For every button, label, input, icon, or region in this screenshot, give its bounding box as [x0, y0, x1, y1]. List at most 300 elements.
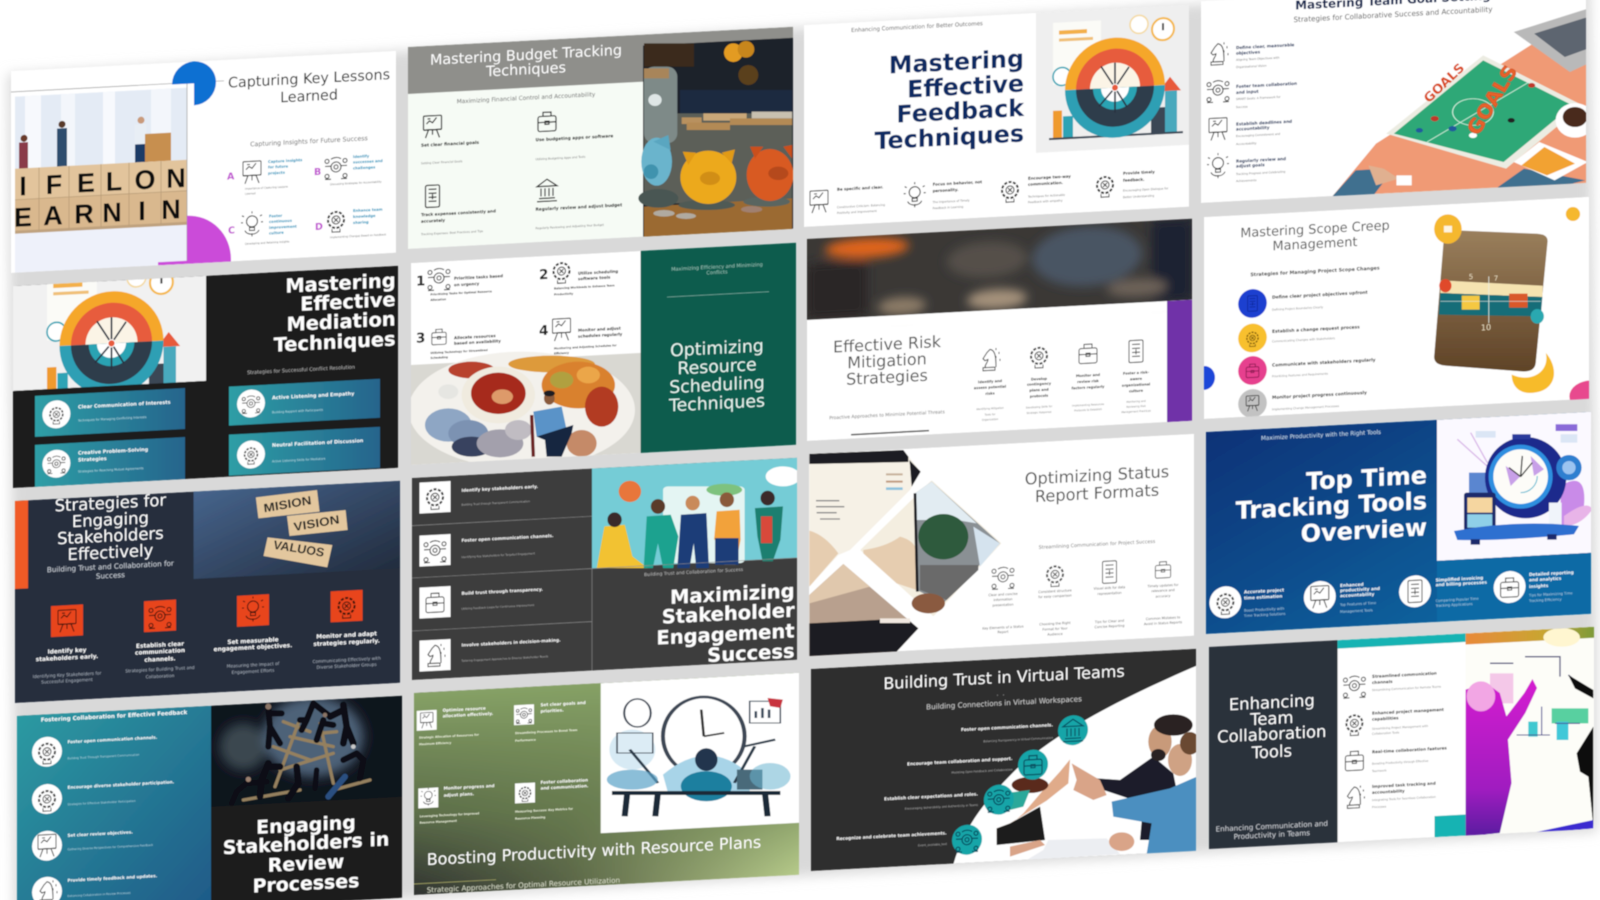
photo: lifelong learning blocks: I: [19, 171, 27, 202]
item: review objectives: Gathering Diverse Perspectives for Comprehensive Feedback: [68, 843, 154, 851]
item: review risk: Protocols to Establish: [1074, 407, 1102, 412]
item C: culture: [269, 231, 284, 235]
item: diverse participation: Encourage diverse stakeholder participation.: [68, 779, 174, 790]
item: deadlines: Accountability: [1236, 141, 1257, 146]
item: decision making: [420, 633, 561, 672]
graphic: speedometer dial: [13, 265, 206, 401]
item D: [315, 207, 387, 240]
illustration: team collaboration: [592, 456, 800, 579]
item: open communication: Balancing Transparency in Virtual Communication: [983, 736, 1053, 743]
item: measurable objectives: engagement objectives.: [214, 643, 292, 653]
item: consistent structure: Audience: [1047, 632, 1063, 637]
subtitle: [47, 559, 174, 583]
photo: person at whiteboard: [1466, 623, 1594, 840]
item: identify stakeholders: Building Trust through Transparent Communication: [462, 499, 530, 507]
item: goals priorities: [514, 700, 586, 743]
title: Top Time: [1306, 461, 1427, 496]
item: timely updates: relevance and: [1151, 588, 1175, 593]
item D: Implementing Changes Based on Feedback: [330, 232, 387, 239]
item: identify stakeholders: Identifying Key Stakeholders for: [33, 670, 102, 680]
item: track expenses: [420, 182, 496, 236]
item C: Foster: [269, 214, 282, 218]
title: Effectively: [67, 541, 154, 564]
photo: soccer board on desk: GOALS: [1421, 61, 1468, 106]
shape: magenta quarter circle: [158, 213, 231, 265]
item: risk aware culture: aware: [1130, 377, 1143, 381]
title: Effective: [907, 69, 1024, 104]
subtitle: Capturing Insights for Future Success: [250, 135, 368, 148]
item B: challenges: [353, 165, 376, 171]
item: achievements: [836, 824, 982, 862]
photo: lifelong learning blocks: F: [46, 169, 62, 200]
item: timely updates: Avoid in Status Reports: [1144, 620, 1182, 626]
item: team collaboration: Modeling Open Feedback and Collaboration: [952, 767, 1013, 775]
item D: knowledge: [353, 214, 376, 219]
item 4: [539, 315, 623, 356]
item: transparency: Build trust through transparency.: [462, 587, 543, 597]
panel: Optimizing Resource Scheduling Techniques: [408, 238, 797, 480]
item: clear concise: [982, 566, 1024, 635]
panel: Strategies for Engaging Stakeholders Effectively: [15, 478, 400, 703]
item: consistent structure: Choosing the Right: [1039, 621, 1071, 627]
item: monitor strategies: [312, 589, 381, 671]
item: clear concise: Key Elements of a Status: [982, 624, 1024, 631]
item: review goals: adjust goals: [1236, 162, 1265, 169]
title: Tracking Tools: [1236, 487, 1427, 525]
item: budgeting apps: [536, 109, 613, 161]
item: optimize allocation: allocation effectively.: [443, 711, 494, 718]
panel: Capturing Key Lessons Learned: [11, 51, 396, 273]
item: deadlines: Establish deadlines and: [1236, 119, 1292, 127]
item B: B: [314, 167, 321, 178]
title: Overview: [1301, 513, 1427, 548]
item 4: 4: [539, 323, 548, 339]
title: Engaging: [256, 812, 356, 839]
item: timely feedback: feedback.: [1123, 177, 1145, 183]
item: expectations: Encouraging Vulnerability and Authenticity in Teams: [905, 803, 979, 811]
item: accountability: productivity and: [1340, 586, 1380, 594]
item: identify risks: Identify and: [978, 379, 1002, 384]
title: Techniques: [874, 119, 1024, 155]
item: communication channels: Establish clear: [136, 642, 184, 650]
item: visual aids: [1094, 560, 1125, 629]
title: [1217, 690, 1326, 764]
item: goals priorities: Streamlining Processes to Boost Team: [515, 728, 577, 735]
item: collaboration: [1207, 76, 1297, 111]
panel: Maximizing Stakeholder Engagement Success: [412, 456, 800, 683]
item: project management: capabilities: [1372, 715, 1399, 722]
header band: [408, 27, 793, 94]
card: creative problem solving: Strategies: [78, 456, 107, 464]
item 4: Efficiency: [554, 351, 569, 355]
panel: Building Trust in Virtual Teams: [811, 649, 1200, 887]
item: monitor strategies: Diverse Stakeholder Groups: [317, 662, 377, 671]
item: change request: Communicating Changes with Stakeholders: [1272, 336, 1336, 343]
item 3: [416, 326, 501, 361]
item: open communication: Building Trust Through Transparent Communication: [68, 753, 140, 760]
photo: mission vision values blocks: MISION: [263, 493, 312, 515]
title: Tools: [1251, 741, 1292, 763]
photo: lifelong learning blocks: L: [106, 166, 122, 197]
panel: Effective Risk Mitigation Strategies: [807, 214, 1192, 441]
item: objectives: Defining Project Boundaries Clearly: [1272, 305, 1323, 312]
item: streamlined communication: Streamlining Communication for Remote Teams: [1372, 684, 1442, 692]
photo: lifelong learning blocks: E: [77, 168, 95, 199]
item: collaboration: Success: [1236, 105, 1248, 109]
card: active listening: [229, 379, 380, 426]
item: review objectives: Set clear review objectives.: [68, 829, 133, 838]
title: Engaging: [72, 508, 149, 531]
title: Strategies for: [55, 491, 166, 515]
item: collaboration: Foster team collaboration: [1236, 81, 1297, 89]
item: consistent structure: Format for Your: [1042, 626, 1068, 632]
item: reporting: Tracking Efficiency: [1528, 597, 1562, 603]
item 3: Allocate resources: [454, 333, 496, 340]
item: consistent structure: for easy comparison: [1038, 593, 1072, 599]
item: monitor strategies: Communicating Effectively with: [312, 655, 381, 665]
photo: mission vision values blocks: VISION: [293, 512, 340, 534]
title: Report Formats: [1035, 481, 1159, 506]
item: monitor: [1238, 383, 1367, 419]
title: Strategies: [846, 366, 928, 389]
item: identify stakeholders: Successful Engagement: [41, 677, 93, 686]
photo: plate with people: [408, 339, 641, 480]
item: accountability: Management Tools: [1340, 608, 1373, 614]
item: collaboration: [515, 777, 589, 821]
item: monitor: Monitor project progress continuously: [1272, 390, 1367, 401]
divider line: [667, 292, 769, 297]
subtitle: Enhancing Communication and: [1216, 819, 1328, 834]
title: Scheduling: [669, 373, 765, 398]
item: track expenses: Tracking Expenses: Best Practices and Tips: [420, 229, 484, 236]
item: monitor strategies: strategies regularly.: [313, 639, 380, 648]
item: reporting: Detailed reporting: [1529, 570, 1574, 578]
item C: improvement: [269, 224, 297, 230]
item 4: schedules regularly: [578, 331, 623, 339]
title: [55, 491, 166, 565]
subtitle: Strategies for Collaborative Success and Accountability: [1293, 5, 1493, 24]
photo: blurred meeting: [807, 214, 1192, 330]
photo: team high five: [997, 714, 1200, 860]
item: expectations: Establish clear expectations and roles.: [884, 791, 978, 802]
title: [1236, 461, 1427, 551]
title: Learned: [280, 87, 338, 106]
item 2: [539, 260, 618, 297]
subtitle: Enhancing Communication for Better Outcomes: [851, 21, 983, 34]
item: collaboration: Measuring Success: Key Metrics for: [515, 807, 574, 814]
item: optimize allocation: Optimize resource: [443, 706, 486, 713]
item: financial goals: Setting Clear Financial Goals: [421, 159, 463, 165]
title: Building Trust in Virtual Teams: [883, 662, 1125, 693]
item: measurable objectives: Measuring the Impact of: [227, 661, 280, 670]
item: streamlined communication: [1343, 670, 1442, 698]
item: focus on behavior: The Importance of Timely: [932, 198, 970, 204]
item A: A: [227, 171, 235, 183]
item: focus on behavior: Focus on behavior, not: [933, 179, 982, 187]
item 3: Utilizing Technology for Streamlined: [430, 348, 488, 355]
item: project management: Enhanced project management: [1372, 707, 1444, 716]
item: review goals: [1207, 150, 1286, 185]
photo: lifelong learning blocks: N: [102, 197, 122, 228]
item 2: Balancing Workloads to Enhance Team: [554, 283, 615, 290]
item: goals priorities: Performance: [515, 738, 536, 743]
lower band: [1437, 553, 1591, 622]
item: team collaboration: Encourage team collaboration and support.: [907, 756, 1013, 767]
shape: left blue half circle: [1193, 365, 1215, 391]
item D: Enhance team: [353, 207, 383, 213]
item: objectives: [1238, 283, 1368, 319]
item: goals priorities: priorities.: [540, 707, 564, 714]
subtitle: Success: [96, 570, 125, 581]
title: [1025, 462, 1169, 507]
item: budgeting apps: Use budgeting apps or software: [536, 133, 613, 143]
panel: Mastering Effective Mediation Techniques: [13, 254, 398, 488]
item: invoicing: [1399, 572, 1487, 610]
subtitle: [671, 262, 763, 278]
item: achievements: Recognize and celebrate team achievements.: [836, 830, 947, 842]
item: measurable objectives: Set measurable: [227, 637, 279, 646]
item: objectives: [1211, 39, 1295, 70]
item: decision making: Involve stakeholders in decision-making.: [462, 637, 561, 649]
photo: soccer board on desk: GOALS: [1462, 61, 1522, 139]
item: identify stakeholders: [420, 476, 538, 514]
decorative line and vertical rule: [11, 81, 224, 273]
item: monitor progress: adjust plans.: [444, 791, 475, 798]
title: Optimizing: [670, 336, 764, 361]
item: identify risks: Identifying Mitigation: [976, 406, 1004, 411]
item: real-time features: Teamwork: [1371, 768, 1387, 773]
item: estimation: Boost Productivity with: [1244, 607, 1284, 613]
item: be specific: Be specific and clear.: [837, 184, 884, 192]
title: Techniques: [485, 60, 566, 80]
item: optimize allocation: Strategic Allocation of Resources for: [419, 733, 479, 740]
item C: continuous: [269, 219, 293, 224]
item 1: 1: [416, 273, 425, 290]
card: creative problem solving: Creative Problem-Solving: [78, 447, 149, 457]
item: risk aware culture: culture: [1129, 389, 1144, 393]
item: task tracking: Processes: [1372, 804, 1387, 809]
item: clear concise: Clear and concise: [988, 592, 1018, 597]
photo: climbers on ladder: [211, 687, 402, 812]
white curved region: [953, 666, 1197, 866]
item: communicate: Communicate with stakeholders regularly: [1272, 357, 1376, 369]
item: invoicing: Comparing Popular Time: [1436, 597, 1479, 603]
item: communication channels: Strategies for Building Trust and: [125, 665, 195, 675]
item: monitor progress: Monitor progress and: [444, 783, 495, 791]
item D: D: [315, 222, 323, 233]
item: objectives: Aligning Team Objectives with: [1236, 56, 1280, 62]
teal top bar: [1338, 634, 1466, 649]
item: invoicing: and billing processes: [1436, 580, 1487, 588]
item 4: Monitoring and Adjusting Schedules for: [554, 343, 617, 350]
item: two-way communication: communication.: [1028, 180, 1064, 187]
item: be specific: [810, 184, 885, 216]
title: Collaboration: [1217, 722, 1326, 747]
item: contingency plans: plans and: [1029, 388, 1049, 393]
item: contingency plans: contingency: [1027, 381, 1052, 387]
item: accountability: Enhanced: [1340, 582, 1364, 589]
item: timely feedback: Better Understanding: [1123, 194, 1154, 199]
item A: [227, 158, 303, 197]
item: two-way communication: Techniques for Actionable: [1027, 193, 1065, 199]
item 3: based on availability: [454, 338, 501, 346]
title: Mastering Budget Tracking: [430, 43, 622, 69]
item: reporting: and analytics: [1529, 576, 1562, 583]
panel: Boosting Productivity with Resource Plans: [414, 673, 799, 895]
title: Mastering Scope Creep: [1240, 219, 1390, 241]
item: review risk: [1072, 343, 1105, 413]
item 4: Monitor and adjust: [578, 325, 621, 333]
title: Team: [1249, 708, 1293, 729]
subtitle: Building Trust and Collaboration for Success: [644, 567, 744, 578]
panel: Mastering Team Goal Setting: [1201, 0, 1594, 217]
item: review objectives: [32, 825, 154, 862]
subtitle: Productivity in Teams: [1234, 828, 1310, 841]
photo: mission vision values blocks: VALUOS: [272, 538, 326, 560]
photo: lifelong learning blocks: A: [43, 200, 63, 231]
item: open communication: [420, 529, 554, 567]
item: review risk: review risk: [1077, 379, 1100, 384]
item: two-way communication: Feedback with empathy: [1028, 198, 1063, 204]
item: track expenses: Track expenses consistently and: [421, 208, 496, 217]
item: streamlined communication: Streamlined communication: [1372, 671, 1437, 679]
item: collaboration: and communication.: [540, 783, 589, 791]
item: objectives: Define clear project objectives upfront: [1272, 290, 1368, 301]
panel: Mastering Effective Feedback Techniques: [804, 5, 1189, 227]
item: open communication: [961, 714, 1088, 751]
item: project management: [1346, 707, 1444, 737]
title: Feedback: [896, 94, 1025, 129]
photo: lifelong learning blocks: O: [134, 164, 156, 196]
title: Enhancing: [1229, 691, 1315, 714]
subtitle: Fostering Collaboration for Effective Feedback: [41, 710, 188, 724]
title: Capturing Key Lessons: [228, 67, 390, 92]
panel: Optimizing Status Report Formats: [809, 430, 1194, 667]
item: financial goals: [421, 113, 479, 165]
title: Mastering: [889, 44, 1024, 80]
item: invoicing: Simplified invoicing: [1436, 575, 1483, 584]
card: clear communication: [35, 388, 185, 437]
item: reporting: [1494, 568, 1574, 605]
item: risk aware culture: Foster a risk-: [1123, 370, 1150, 376]
card: active listening: Building Rapport with Participants: [272, 408, 323, 414]
item: transparency: Utilizing Feedback Loops for Continuous Improvement: [462, 603, 534, 611]
item: project management: Streamlining Project Management with: [1372, 724, 1428, 731]
item: review goals: Achievements: [1236, 178, 1257, 183]
item 1: Prioritize tasks based: [454, 273, 503, 281]
item: project management: Collaboration Tools: [1372, 730, 1400, 736]
title: Mitigation: [847, 349, 927, 372]
item: real-time features: Real-time collaboration features: [1372, 745, 1447, 754]
item: review goals: Regularly review and: [1236, 156, 1286, 164]
item: timely updates: Common Mistakes to: [1146, 615, 1180, 621]
item: budgeting apps: Utilizing Budgeting Apps and Tools: [536, 155, 586, 161]
item: communicate: [1238, 350, 1376, 386]
item: clear concise: Report: [998, 630, 1009, 634]
item: focus on behavior: Feedback in Learning: [933, 205, 964, 210]
item B: [314, 153, 383, 187]
item: risk aware culture: organizational: [1122, 382, 1150, 388]
item: review risk: Implementing Resources: [1072, 402, 1105, 408]
card: creative problem solving: [35, 437, 185, 487]
item 1: Allocation: [430, 297, 446, 302]
title: Maximizing: [670, 579, 795, 609]
item: measurable objectives: Engagement Efforts: [232, 668, 275, 676]
subtitle: Proactive Approaches to Minimize Potential Threats: [829, 409, 945, 421]
item 1: [416, 265, 503, 303]
item: clear concise: information: [993, 597, 1013, 602]
divider: [414, 880, 496, 884]
item: task tracking: [1347, 781, 1436, 810]
subtitle: Building Connections in Virtual Workspaces: [926, 694, 1082, 711]
graphic: wooden board timeline: 5: [1469, 273, 1473, 281]
item: objectives: Define clear, measurable: [1236, 42, 1295, 50]
item: be specific: Positivity and Improvement: [837, 209, 878, 215]
item: risk aware culture: Monitoring and: [1126, 399, 1146, 404]
title: [833, 332, 942, 390]
item A: for future: [268, 164, 289, 170]
title: [1240, 219, 1390, 256]
item: timely feedback: [1097, 168, 1169, 201]
item: communication channels: communication: [135, 648, 185, 657]
subtitle: Building Trust and Collaboration for: [47, 559, 174, 574]
item: identify risks: Organization: [982, 417, 999, 422]
item 2: Utilize scheduling: [578, 269, 618, 276]
item: timely updates: Timely updates for: [1147, 583, 1179, 588]
subtitle: [1216, 819, 1328, 842]
illustration: stopwatch on platform: [1437, 412, 1592, 561]
title: Techniques: [274, 327, 396, 357]
photo: mission vision values blocks: [194, 481, 400, 579]
item: identify stakeholders: Identify key stakeholders early.: [462, 484, 538, 494]
item: collaboration: and input: [1236, 89, 1259, 95]
item: open communication: Foster open communication channels.: [462, 533, 554, 544]
card: clear communication: Clear Communication of Interests: [78, 400, 171, 411]
card: clear communication: Techniques for Managing Conflicting Interests: [77, 415, 147, 423]
item: communicate: Prioritizing Features and Requirements: [1272, 371, 1329, 378]
item: risk aware culture: Reviewing Risk: [1126, 404, 1146, 409]
item: consistent structure: [1038, 566, 1072, 637]
item: decision making: Tailoring Engagement Approaches to Diverse Stakeholder Needs: [461, 654, 549, 663]
item: deadlines: Encouraging Commitment and: [1236, 132, 1280, 138]
item: contingency plans: [1026, 347, 1053, 415]
item A: projects: [268, 171, 286, 176]
photo: piggy banks: [638, 33, 793, 245]
item: open communication: Foster open communication channels.: [68, 735, 158, 744]
item: timely updates: [32, 871, 158, 900]
item: collaboration: SMART Goals: A Framework for: [1236, 95, 1281, 101]
item: team collaboration: [907, 749, 1048, 786]
card: neutral facilitation: [229, 427, 380, 476]
photo: lifelong learning blocks: N: [166, 163, 186, 194]
panel: Engaging Stakeholders in Review Processes: [17, 687, 402, 900]
photo: lifelong learning blocks: N: [161, 194, 181, 225]
title: [668, 336, 765, 417]
graphic: speedometer dial: [1036, 5, 1189, 153]
item: review budget: Regularly Reviewing and Adjusting Your Budget: [536, 223, 605, 230]
item: review budget: [536, 175, 622, 230]
item 3: 3: [416, 330, 425, 347]
card: active listening: Active Listening and Empathy: [272, 391, 355, 401]
side panel: [1209, 638, 1338, 851]
item: focus on behavior: personality.: [933, 187, 959, 193]
panel: Mastering Scope Creep Management: [1193, 195, 1600, 434]
item: measurable objectives: [214, 593, 292, 677]
item: estimation: Accurate project: [1244, 587, 1284, 596]
item: expectations: [884, 784, 1014, 821]
item 2: software tools: [578, 275, 611, 281]
item A: Learned: [245, 191, 256, 196]
